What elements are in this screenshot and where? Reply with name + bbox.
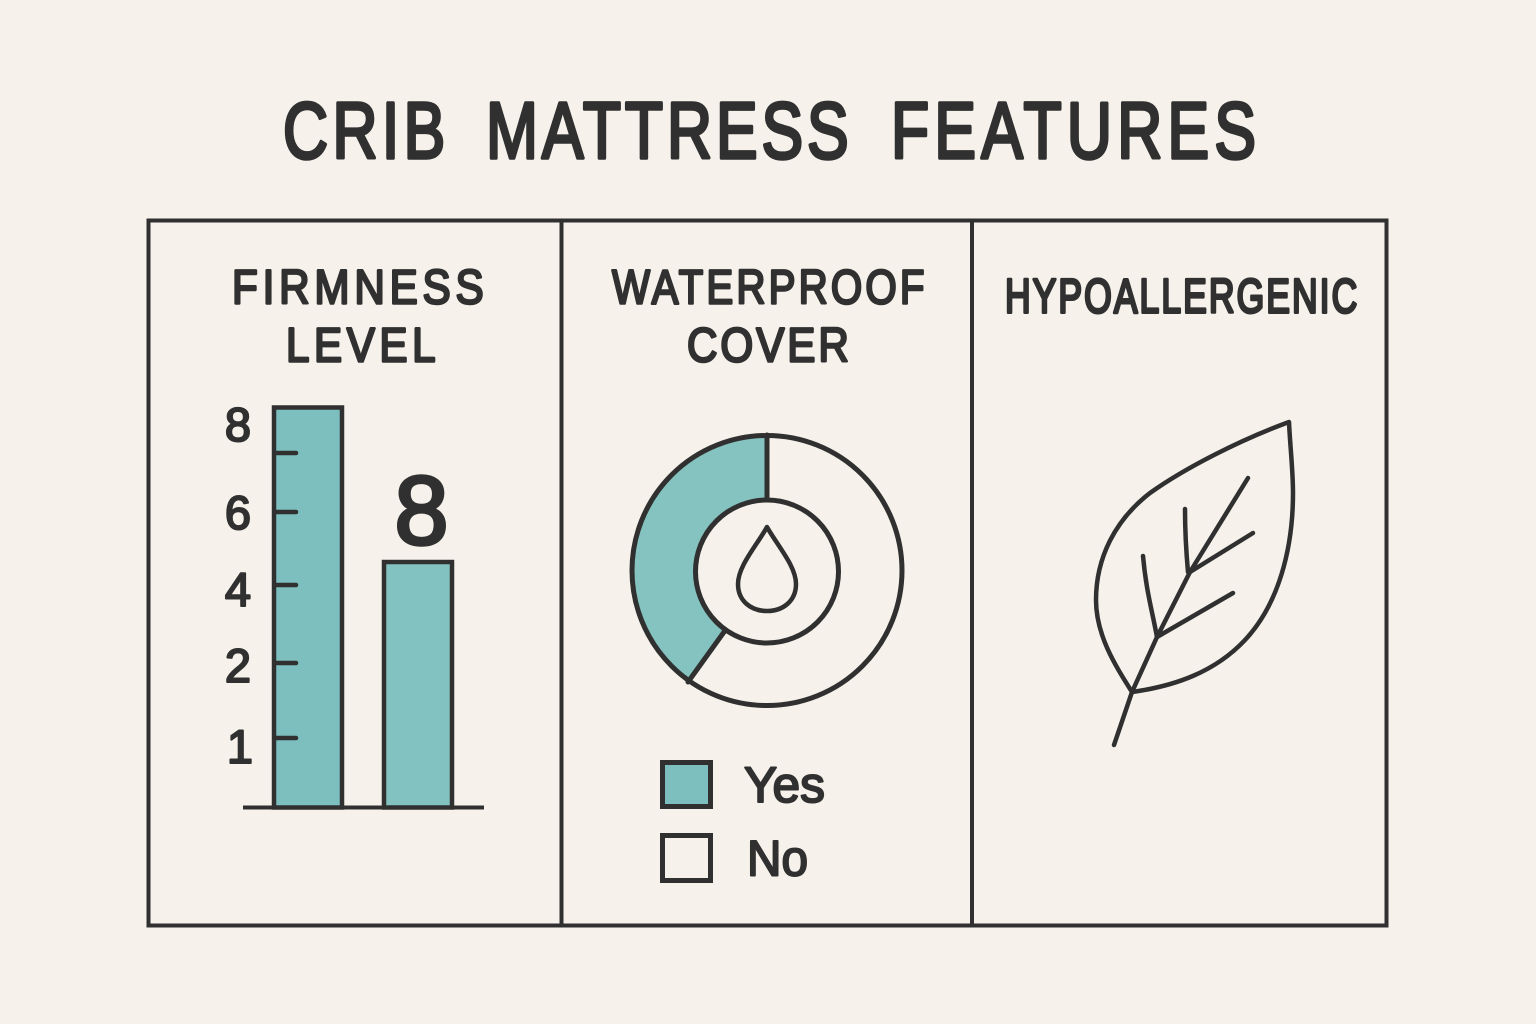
axis ticks xyxy=(275,453,296,738)
heading: firmness level xyxy=(232,260,484,372)
legend: no xyxy=(662,830,808,886)
legend: yes xyxy=(662,757,825,813)
donut outlines xyxy=(632,435,902,706)
donut chart xyxy=(631,435,902,706)
icon: water drop xyxy=(738,527,796,611)
title: CRIB xyxy=(283,87,445,176)
value label: 8 xyxy=(395,456,448,565)
heading: firmness level: FIRMNESS xyxy=(232,260,484,314)
axis labels: 1 xyxy=(227,720,253,773)
title: FEATURES xyxy=(891,87,1256,176)
tall bar xyxy=(274,408,342,808)
panel: hypoallergenic xyxy=(1005,269,1357,745)
axis labels: 4 xyxy=(225,563,251,616)
heading: waterproof cover: COVER xyxy=(687,318,849,372)
panel frame with three columns xyxy=(148,220,1386,926)
title: MATTRESS xyxy=(486,87,849,176)
heading: waterproof cover xyxy=(612,261,924,372)
heading: firmness level: LEVEL xyxy=(286,318,436,372)
axis labels: 2 xyxy=(225,639,251,692)
panel: firmness level xyxy=(225,260,484,808)
axis labels: 8 xyxy=(225,398,251,451)
axis labels: 6 xyxy=(225,486,251,539)
bar chart xyxy=(225,398,484,808)
legend: no: No xyxy=(747,830,808,886)
axis baseline xyxy=(243,806,484,810)
legend xyxy=(662,757,825,886)
legend: yes: Yes xyxy=(744,757,825,813)
icon: leaf xyxy=(1096,422,1293,745)
short bar xyxy=(384,562,452,808)
heading: hypoallergenic: HYPOALLERGENIC xyxy=(1005,269,1357,323)
yes segment xyxy=(631,435,767,681)
title xyxy=(283,87,1256,176)
axis labels xyxy=(225,398,253,773)
heading: waterproof cover: WATERPROOF xyxy=(612,261,924,314)
panel: waterproof cover xyxy=(612,261,924,886)
